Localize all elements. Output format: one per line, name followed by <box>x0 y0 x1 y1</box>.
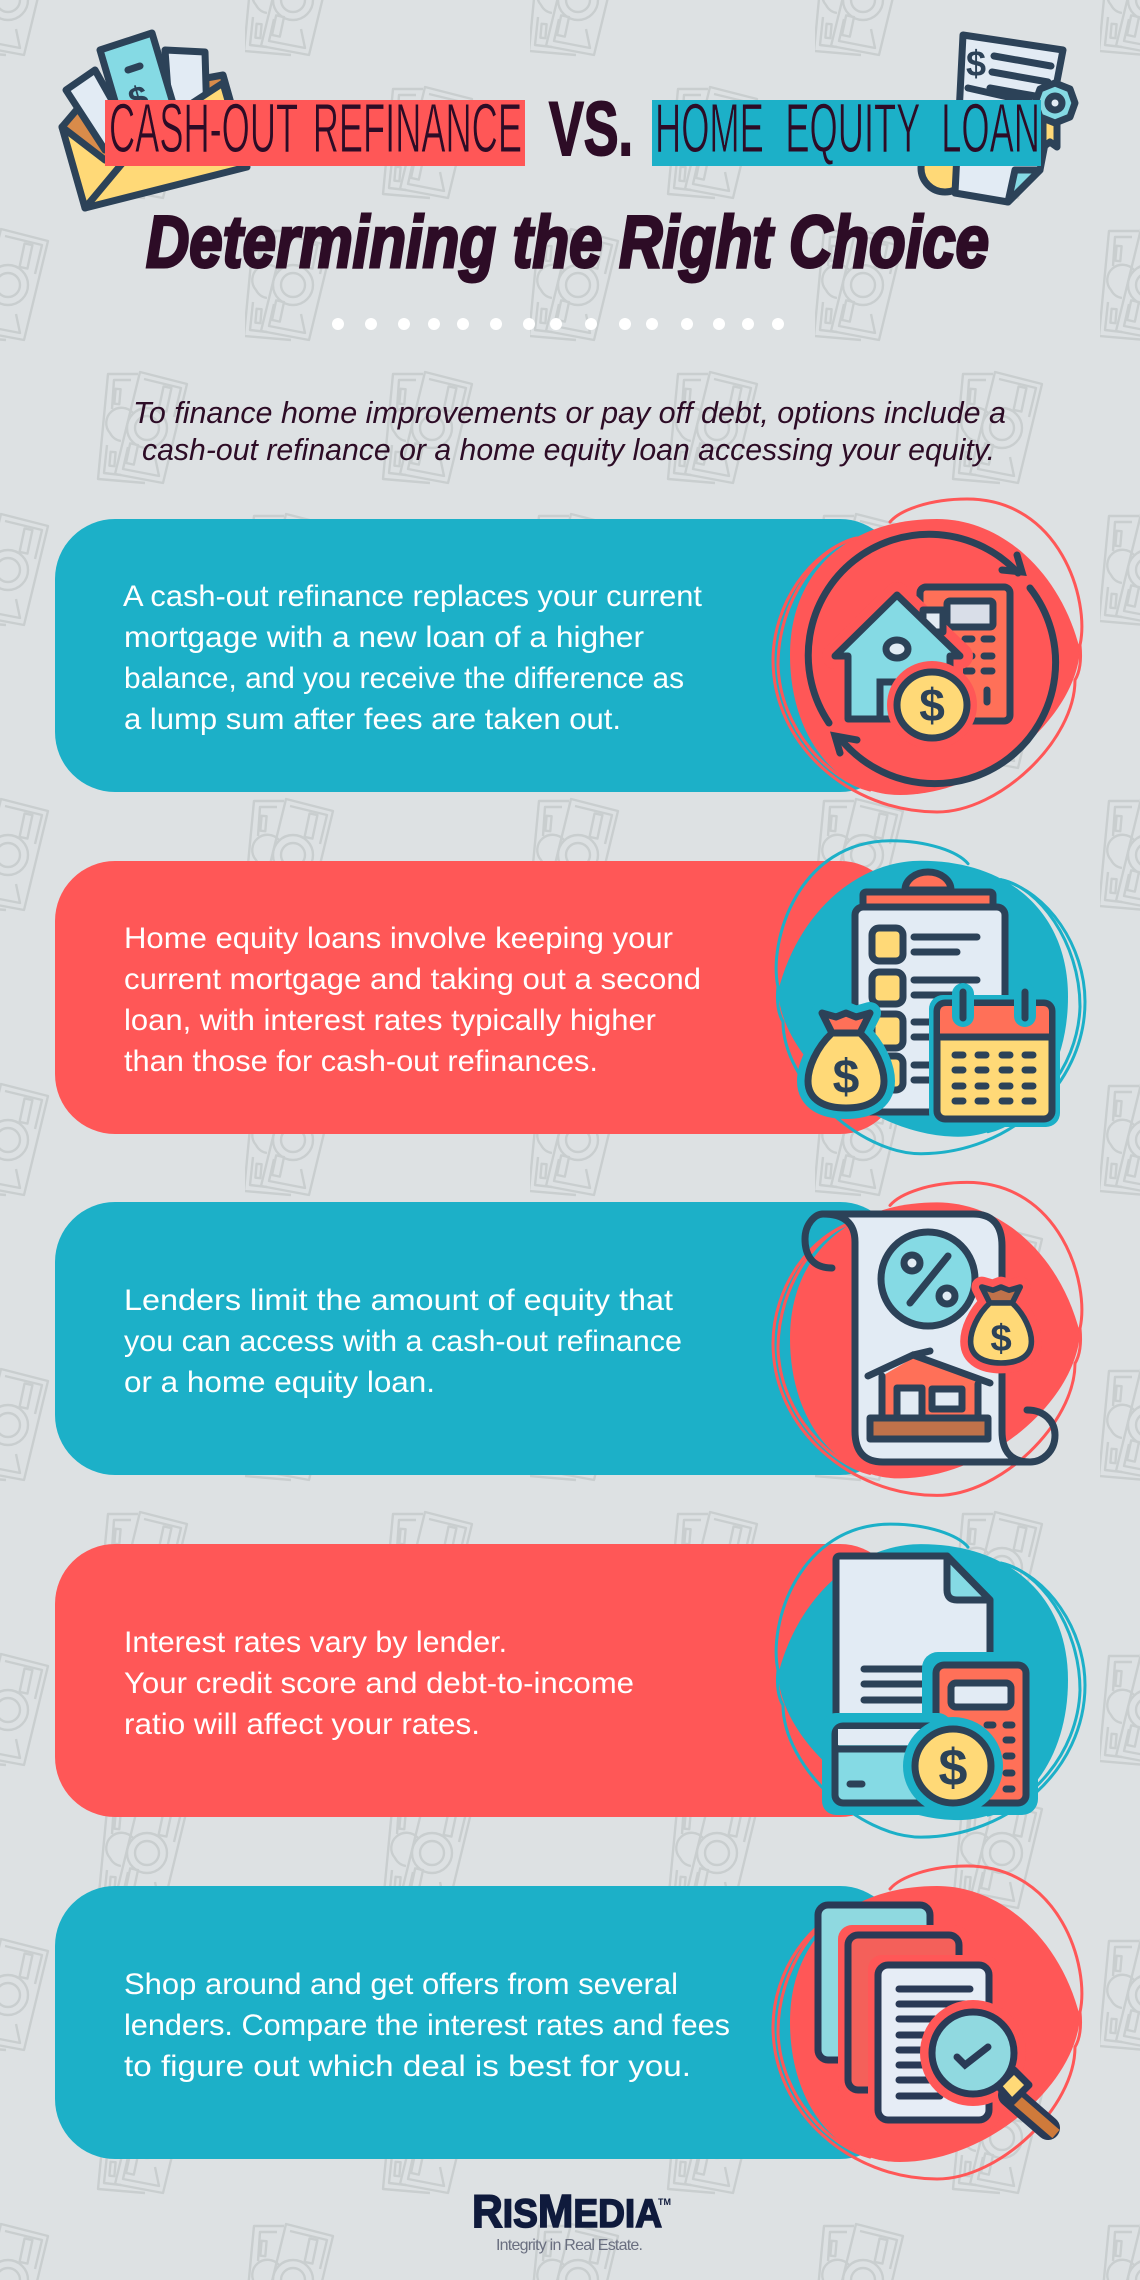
text: panel 3 <box>124 1284 682 1399</box>
text: panel 4: ratio will affect your rates. <box>124 1708 480 1741</box>
text: panel 2 <box>124 922 701 1078</box>
icon: document, calculator, card and coin <box>822 1556 1038 1815</box>
dotted divider <box>332 318 784 330</box>
text: panel 5: Shop around and get offers from several <box>124 1968 678 2001</box>
icon: clipboard, money bag and calendar <box>808 872 1060 1127</box>
panel: equity limits <box>55 1182 1082 1495</box>
text: panel 1: mortgage with a new loan of a higher <box>124 621 644 654</box>
text: panel 1 <box>123 580 703 736</box>
text: panel 2: than those for cash-out refinances. <box>124 1045 598 1078</box>
logo: RisMedia: TM <box>658 2197 671 2207</box>
text: panel 4: Your credit score and debt-to-income <box>124 1667 634 1700</box>
text: panel 2: current mortgage and taking out a second <box>124 963 701 996</box>
icon: house, calculator and circular arrows <box>808 534 1056 784</box>
text: panel 4: Interest rates vary by lender. <box>124 1626 507 1659</box>
panel: home equity loan explanation <box>55 841 1085 1154</box>
text: panel 5: lenders. Compare the interest rates and fees <box>124 2009 730 2042</box>
text: panel 4 <box>124 1626 634 1741</box>
text: panel 3: you can access with a cash-out refinance <box>124 1325 682 1358</box>
label: vs: VS. <box>549 87 633 172</box>
panel: cash-out refinance explanation <box>55 499 1082 812</box>
text: panel 1: balance, and you receive the difference as <box>124 662 684 695</box>
intro text: cash-out refinance or a home equity loan accessing your equity. <box>142 432 995 467</box>
icon: scroll with percent, house and money bag <box>805 1214 1055 1462</box>
logo: RisMedia: RISMEDIA <box>472 2185 662 2237</box>
text: panel 3: or a home equity loan. <box>124 1366 435 1399</box>
icon: loan certificate <box>921 35 1075 202</box>
text: panel 1: A cash-out refinance replaces your current <box>123 580 703 613</box>
panel: interest rates <box>55 1524 1085 1837</box>
text: panel 5 <box>124 1968 730 2083</box>
intro text: To finance home improvements or pay off debt, options include a <box>133 395 1006 430</box>
text: panel 2: loan, with interest rates typically higher <box>124 1004 656 1037</box>
icon: clipboard, money bag and calendar: $ <box>833 1051 860 1104</box>
icon: envelope with cash: $ <box>124 78 153 120</box>
text: panel 3: Lenders limit the amount of equity that <box>124 1284 674 1317</box>
label: cash-out refinance: CASH-OUT REFINANCE <box>109 89 522 167</box>
icon: envelope with cash <box>62 33 247 208</box>
text: panel 5: to figure out which deal is best for you. <box>124 2050 691 2083</box>
icon: loan certificate: $ <box>966 43 986 84</box>
icon: scroll with percent, house and money bag: $ <box>990 1317 1012 1360</box>
panel: shop around <box>55 1866 1082 2179</box>
intro text <box>133 395 1006 467</box>
logo: RisMedia: Integrity in Real Estate. <box>496 2237 643 2254</box>
icon: house, calculator and circular arrows: $ <box>919 679 945 731</box>
icon: documents and magnifier <box>818 1905 1056 2134</box>
label: cash-out refinance <box>105 89 525 167</box>
text: panel 2: Home equity loans involve keeping your <box>124 922 673 955</box>
text: panel 1: a lump sum after fees are taken out. <box>124 703 621 736</box>
icon: document, calculator, card and coin: $ <box>939 1739 968 1797</box>
